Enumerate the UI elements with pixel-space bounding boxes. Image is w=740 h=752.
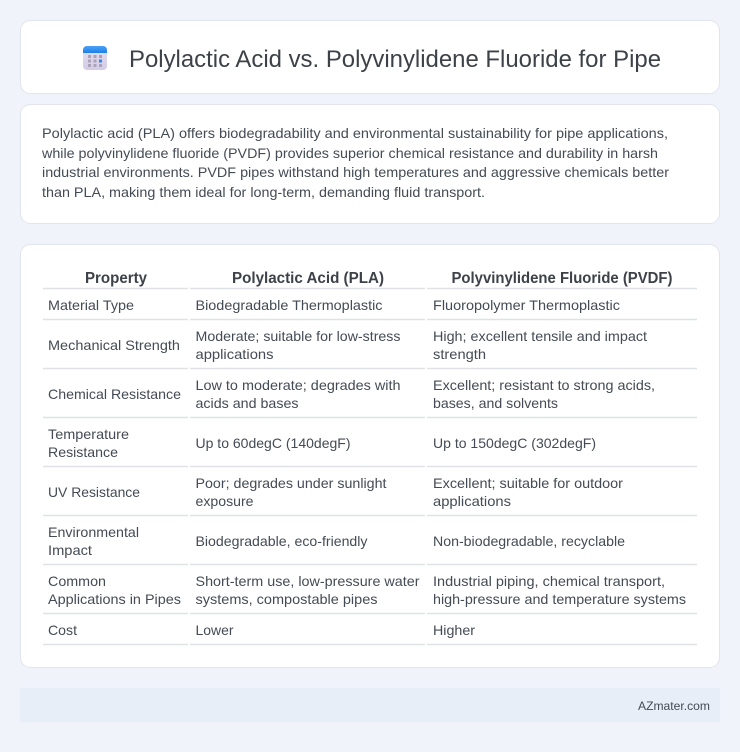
row: common applications: high-pressure and temperature systems (433, 591, 686, 607)
row: mechanical strength: High; excellent tensile and impact (433, 328, 647, 344)
row: common applications: systems, compostable pipes (196, 591, 378, 607)
row: cost: Lower (196, 622, 234, 638)
row: chemical resistance: Excellent; resistant to strong acids, (433, 377, 655, 393)
row: chemical resistance: acids and bases (196, 395, 298, 411)
footer (20, 688, 720, 722)
text block: summary: than PLA, making them ideal for long-term, demanding fluid transport. (42, 184, 485, 200)
row: temperature resistance: Temperature (48, 426, 129, 442)
row: chemical resistance: Low to moderate; degrades with (196, 377, 400, 393)
row: common applications: Common (48, 573, 106, 589)
table header: Polylactic Acid (PLA) (232, 270, 384, 287)
icon: calendar (83, 46, 107, 70)
row: common applications: Short-term use, low-pressure water (196, 573, 420, 589)
row: chemical resistance: bases, and solvents (433, 395, 558, 411)
row: mechanical strength: applications (196, 346, 274, 362)
row: cost: Cost (48, 622, 77, 638)
text block: summary: Polylactic acid (PLA) offers biodegradability and environmental sustainability for pipe applications, (42, 125, 668, 141)
row: temperature resistance: Resistance (48, 444, 118, 460)
table header (85, 270, 672, 287)
row: temperature resistance: Up to 150degC (302degF) (433, 435, 596, 451)
row: uv resistance (48, 475, 623, 509)
row: uv resistance: applications (433, 493, 511, 509)
row: mechanical strength: Mechanical Strength (48, 337, 180, 353)
row: cost: Higher (433, 622, 475, 638)
row: uv resistance: UV Resistance (48, 484, 140, 500)
row: common applications: Applications in Pipes (48, 591, 181, 607)
text block: summary: while polyvinylidene fluoride (PVDF) provides superior chemical resistance and durability in harsh (41, 145, 658, 161)
row: mechanical strength (48, 328, 647, 362)
row: environmental impact: Impact (48, 542, 92, 558)
row: environmental impact: Environmental (48, 524, 139, 540)
table header: Property (85, 270, 147, 287)
title: Polylactic Acid vs. Polyvinylidene Fluoride for Pipe (129, 46, 661, 73)
table header: Polyvinylidene Fluoride (PVDF) (452, 270, 672, 287)
row: temperature resistance (48, 426, 596, 460)
panel: comparison table (20, 244, 720, 668)
row: uv resistance: exposure (196, 493, 254, 509)
row: environmental impact (48, 524, 625, 558)
row: environmental impact: Non-biodegradable, recyclable (433, 533, 625, 549)
footer credit: AZmater.com (638, 699, 710, 713)
row: material type (48, 297, 620, 313)
panel: title header (20, 20, 720, 94)
row: common applications: Industrial piping, chemical transport, (433, 573, 665, 589)
row: environmental impact: Biodegradable, eco-friendly (196, 533, 368, 549)
text block: summary (41, 125, 669, 200)
row: temperature resistance: Up to 60degC (140degF) (196, 435, 350, 451)
row: common applications (48, 573, 686, 607)
row: cost (48, 622, 475, 638)
row: material type: Biodegradable Thermoplastic (196, 297, 382, 313)
row: uv resistance: Poor; degrades under sunlight (196, 475, 387, 491)
row: chemical resistance: Chemical Resistance (48, 386, 181, 402)
row: material type: Fluoropolymer Thermoplastic (433, 297, 620, 313)
row: uv resistance: Excellent; suitable for outdoor (433, 475, 623, 491)
row: mechanical strength: Moderate; suitable for low-stress (196, 328, 400, 344)
row: mechanical strength: strength (433, 346, 486, 362)
row: chemical resistance (48, 377, 655, 411)
panel: description (20, 104, 720, 224)
text block: summary: industrial environments. PVDF pipes withstand high temperatures and aggressive chemicals better (42, 164, 669, 180)
row: material type: Material Type (48, 297, 134, 313)
